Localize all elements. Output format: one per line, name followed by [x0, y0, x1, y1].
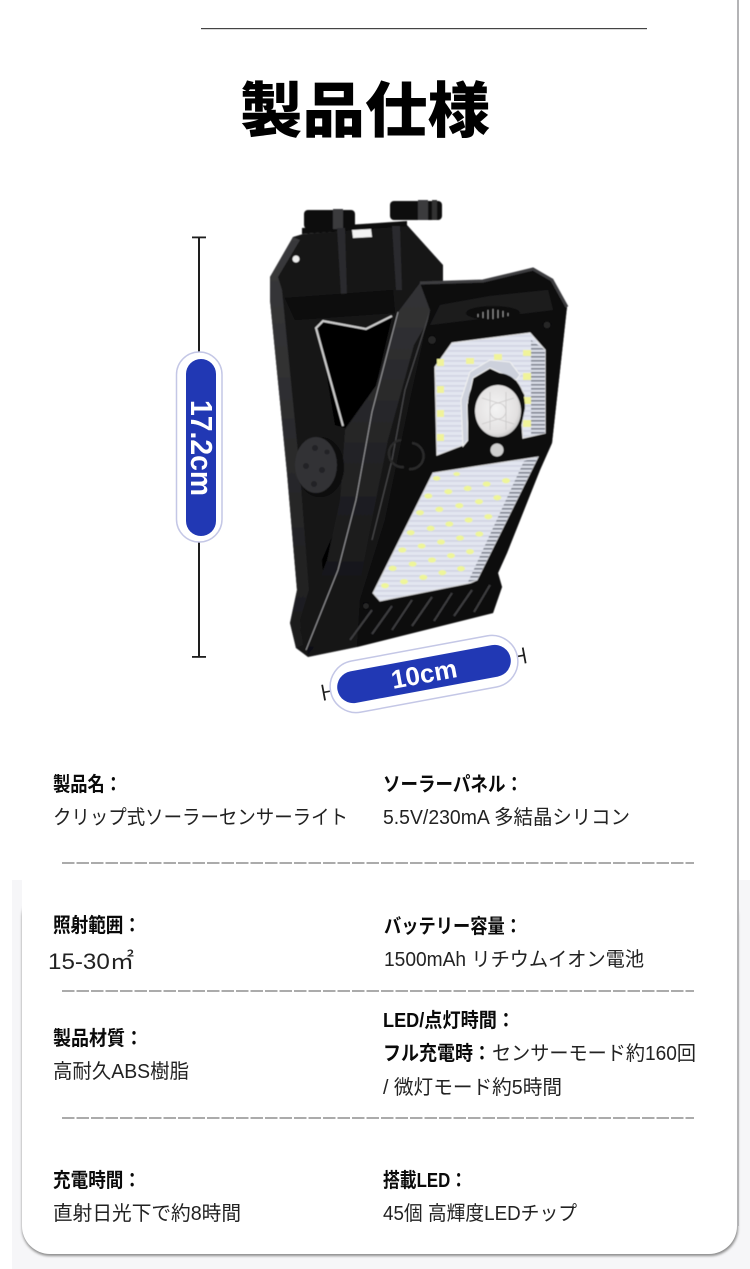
width label: 10cm [389, 653, 459, 695]
spec: charge time [53, 1169, 241, 1225]
background panel [12, 880, 750, 1269]
upper LED panel [435, 333, 545, 455]
clip cavity [318, 317, 392, 428]
divider [62, 990, 694, 992]
moon emboss [389, 440, 424, 469]
spec: solar panel: ソーラーパネル： [383, 773, 523, 796]
spec: product name [53, 773, 348, 829]
left bevel [270, 237, 309, 648]
dimension line [321, 647, 527, 701]
silhouette [270, 225, 567, 657]
spec: lighting time [383, 1009, 696, 1099]
spec: lighting time: LED/点灯時間： [383, 1009, 515, 1032]
spec: lighting time: フル充電時： [383, 1042, 491, 1065]
spec: material: 製品材質： [53, 1027, 143, 1050]
spring wire [316, 316, 392, 426]
spec: battery [384, 915, 644, 971]
lower LED panel [373, 457, 538, 601]
spec: lighting time: センサーモード約160回 [492, 1042, 696, 1065]
spec: illumination range: 15-30㎡ [48, 949, 134, 974]
face frame [357, 269, 567, 647]
outer pill [176, 352, 222, 542]
product: clip solar light [270, 200, 567, 657]
clip knobs [302, 200, 442, 238]
clip back columns [285, 226, 402, 320]
outer pill [326, 631, 522, 717]
speaker vent [466, 306, 520, 320]
spec: solar panel [383, 773, 630, 829]
thumb screw [295, 437, 344, 497]
spec: lighting time: / 微灯モード約5時間 [383, 1076, 562, 1099]
dimension line [192, 236, 206, 658]
title: 製品仕様 [240, 78, 490, 145]
clip arm [300, 283, 440, 655]
divider [62, 862, 694, 864]
spec: solar panel: 5.5V/230mA 多結晶シリコン [383, 806, 630, 829]
inner pill [186, 359, 216, 536]
height label: 17.2cm [184, 400, 219, 496]
spec: battery: バッテリー容量： [384, 915, 522, 938]
width dimension [318, 630, 530, 718]
spec: material: 高耐久ABS樹脂 [53, 1060, 189, 1083]
spec: product name: 製品名： [53, 773, 122, 796]
notch [352, 229, 372, 238]
spec: battery: 1500mAh リチウムイオン電池 [384, 948, 644, 971]
top rule [201, 28, 647, 29]
spec: LEDs [383, 1169, 577, 1225]
spec: material [53, 1027, 189, 1083]
divider [62, 1117, 694, 1119]
sensor arch [461, 360, 520, 446]
spec: product name: クリップ式ソーラーセンサーライト [53, 806, 348, 829]
inner pill [335, 642, 513, 706]
motion sensor [468, 373, 525, 456]
bottom fins [350, 585, 490, 640]
spec: charge time: 充電時間： [53, 1169, 141, 1192]
height dimension [176, 236, 222, 658]
spec: illumination range: 照射範囲： [53, 914, 141, 937]
spec: LEDs: 45個 高輝度LEDチップ [383, 1202, 577, 1225]
spec: LEDs: 搭載LED： [383, 1169, 467, 1192]
spec: illumination range [48, 914, 141, 974]
arm highlight [306, 312, 398, 650]
screws [362, 321, 551, 610]
spec: charge time: 直射日光下で約8時間 [53, 1202, 241, 1225]
